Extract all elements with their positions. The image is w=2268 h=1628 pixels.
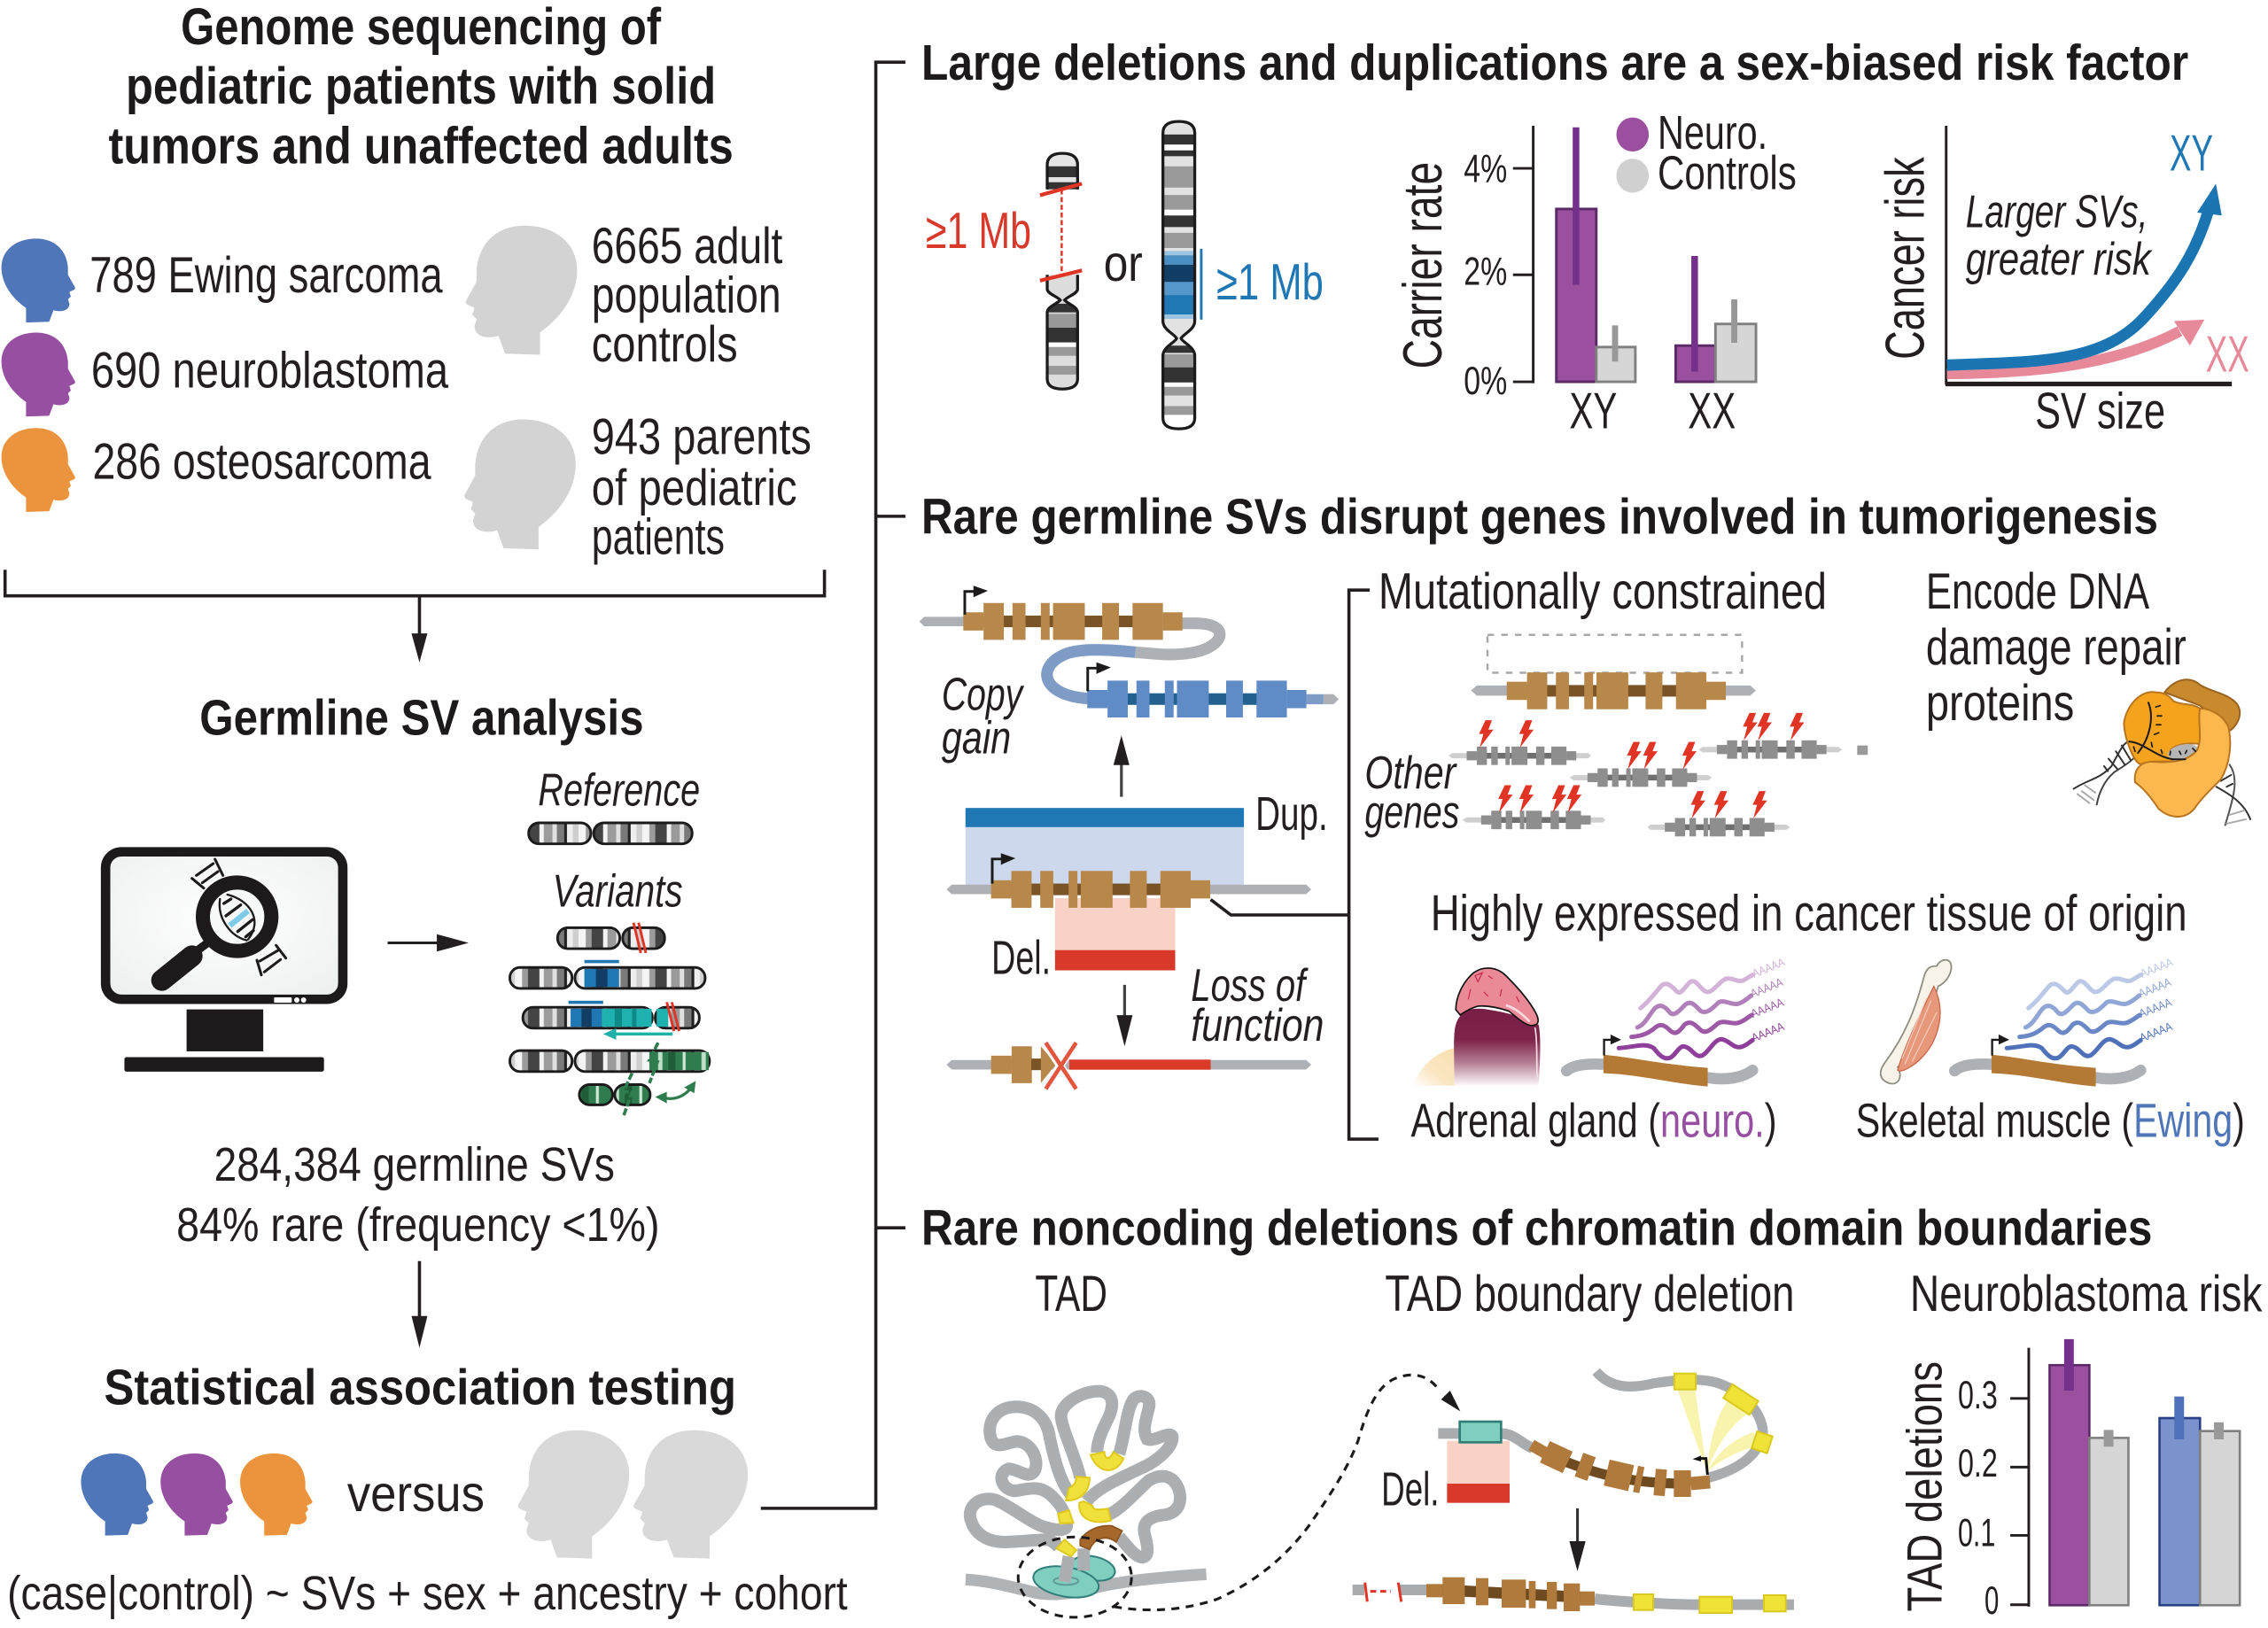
label: copy gain [942,670,1024,764]
bar chart: TAD deletions: TAD deletions [1898,1361,1953,1611]
label: other genes [1364,748,1459,839]
label: or: or [1104,236,1143,292]
icon: computer with magnifier over DNA [105,852,343,1072]
label: DNA damage repair: damage repair [1926,619,2186,676]
bar chart: carrier rate: 2% [1464,251,1507,294]
label: TAD: TAD [1035,1266,1107,1322]
arrow: up to copy gain [1114,735,1130,797]
bar chart: carrier rate [1393,126,1756,439]
arrow: computer to variants [388,934,469,951]
icon: blue head, case [81,1454,153,1536]
bracket: cohorts joined [5,570,825,596]
label: dup: Dup. [1255,787,1328,841]
heading: genome sequencing [108,0,734,175]
label: parents of pediatric patients: 943 parents [592,409,812,466]
label: germline SV counts: 284,384 germline SVs [214,1138,615,1191]
label: mutationally constrained: Mutationally constrained [1379,563,1827,620]
legend: neuro vs controls: Neuro. [1658,106,1767,159]
bar chart: TAD deletions: 0.1 [1958,1511,1995,1554]
icon: gray head, control [633,1430,748,1559]
heading: statistical association testing: Statistical association testing [105,1359,736,1415]
diagram: highly expressed gene, neuro: AAAAA [1748,975,1785,1000]
label: del: Del. [991,931,1051,984]
bar chart: carrier rate: 0% [1464,360,1507,403]
diagram: truncated gene [946,1043,1311,1089]
label: reference: Reference [538,764,700,816]
label: loss of function: Loss of [1191,960,1309,1012]
line chart: cancer risk by SV size: SV size [2035,383,2165,439]
arrow: down to loss of function [1116,985,1132,1046]
arrow: dashed from TAD to boundary [1114,1375,1460,1610]
label: osteosarcoma count: 286 osteosarcoma [92,433,431,490]
diagram: duplication and deletion over gene [946,808,1311,971]
diagram: highly expressed gene, Ewing: AAAAA [2138,955,2175,981]
label: adrenal gland: Adrenal gland (neuro.) [1410,1094,1777,1147]
icon: gray head, adult controls [466,226,577,355]
line chart: cancer risk by SV size: greater risk [1966,234,2153,285]
diagram: other genes with mutations [1449,713,1868,836]
label: parents of pediatric patients: patients [592,508,725,565]
label: adult population controls [592,218,782,373]
chromosomes: structural variants [510,923,710,1116]
bar chart: TAD deletions: 0.3 [1958,1374,1998,1417]
label: loss of function [1191,960,1324,1051]
diagram: highly expressed gene, neuro: AAAAA [1750,955,1787,981]
label: deletion size: ≥1 Mb [926,203,1031,260]
icon: gray head, parents [464,419,576,549]
arrow: cohorts to analysis [411,596,427,663]
label: other genes: genes [1364,787,1459,839]
label: adult population controls: 6665 adult [592,218,782,275]
bar chart: TAD deletions [1898,1339,2240,1623]
icon: blue head [2,238,75,322]
label: DNA damage repair: proteins [1926,675,2074,732]
label: neuroblastoma count: 690 neuroblastoma [91,343,448,399]
diagram: TAD chromatin loops [966,1392,1207,1617]
bar chart: TAD deletions: 0 [1984,1579,1999,1623]
label: germline SV counts: 84% rare (frequency <1%) [176,1198,659,1252]
legend: neuro vs controls: Controls [1658,146,1797,199]
label: regression formula: (case|control) ~ SVs + sex + ancestry + cohort [7,1567,848,1620]
label: Ewing sarcoma count: 789 Ewing sarcoma [89,247,443,304]
diagram: gene after boundary deletion [1353,1578,1794,1613]
diagram: highly expressed gene, Ewing: AAAAA [2137,996,2173,1020]
arrow: deletion result [1569,1508,1586,1571]
label: parents of pediatric patients: of pediatric [592,460,797,516]
bar chart: carrier rate: XX [1688,383,1736,439]
heading: germline SV analysis: Germline SV analysis [199,689,644,745]
icon: purple head [2,333,75,416]
icon: orange head, case [240,1454,313,1536]
illustration: adrenal gland [1413,968,1541,1087]
label: copy gain: Copy [942,670,1024,721]
line chart: cancer risk by SV size: Larger SVs, [1966,186,2148,237]
diagram: highly expressed gene, neuro: AAAAA [1750,1019,1786,1044]
diagram: highly expressed gene, Ewing: AAAAA [2138,1019,2174,1044]
label: copy gain: gain [942,713,1011,764]
heading: genome sequencing: tumors and unaffected adults [108,118,734,175]
label: duplication size: ≥1 Mb [1216,254,1324,311]
line chart: cancer risk by SV size: XY [2170,126,2213,182]
chromosome: reference [529,823,692,844]
label: variants: Variants [553,866,683,918]
icon: orange head [2,428,75,512]
label: loss of function: function [1191,1000,1324,1051]
connector: testing to findings [761,62,905,1508]
arrow: analysis to testing [411,1261,427,1348]
label: DNA damage repair: Encode DNA [1926,563,2149,620]
label: versus: versus [347,1466,485,1523]
label: TAD boundary deletion: TAD boundary deletion [1385,1266,1794,1322]
chromosome with deletion [1040,153,1084,391]
illustration: skeletal muscle and bone [1881,960,1952,1084]
legend: neuro vs controls [1616,106,1797,199]
diagram: boundary deletion on gene [1438,1371,1773,1503]
diagram: copy gain gene [920,585,1339,717]
bar chart: carrier rate: 4% [1464,148,1507,191]
bar chart: TAD deletions: 0.2 [1958,1442,1998,1485]
bar chart: carrier rate: XY [1569,383,1617,439]
heading: genome sequencing: pediatric patients with solid [126,58,716,115]
diagram: highly expressed gene, Ewing: AAAAA [2136,975,2173,1000]
icon: gray head, control [517,1430,629,1559]
label: germline SV counts [176,1138,659,1252]
diagram: highly expressed gene, neuro [1566,955,1787,1087]
icon: purple head, case [160,1454,233,1536]
label: adult population controls: controls [592,316,738,373]
connector: gene to properties [1211,590,1379,1139]
label: parents of pediatric patients [592,409,812,565]
bar chart: carrier rate: Carrier rate [1393,162,1454,368]
label: DNA damage repair [1926,563,2186,732]
diagram: highly expressed gene, neuro: AAAAA [1749,996,1785,1020]
chromosome with duplication [1157,121,1201,430]
label: adult population controls: population [592,267,781,324]
label: skeletal muscle: Skeletal muscle (Ewing) [1856,1094,2245,1147]
label: del: Del. [1381,1463,1439,1516]
label: other genes: Other [1364,748,1457,799]
line chart: cancer risk by SV size [1875,126,2249,439]
icon: repair protein on DNA [2074,679,2250,826]
diagram: highly expressed gene, Ewing [1954,955,2175,1087]
line chart: cancer risk by SV size: Cancer risk [1875,157,1936,360]
diagram: constrained gene with no mutations [1471,635,1756,709]
